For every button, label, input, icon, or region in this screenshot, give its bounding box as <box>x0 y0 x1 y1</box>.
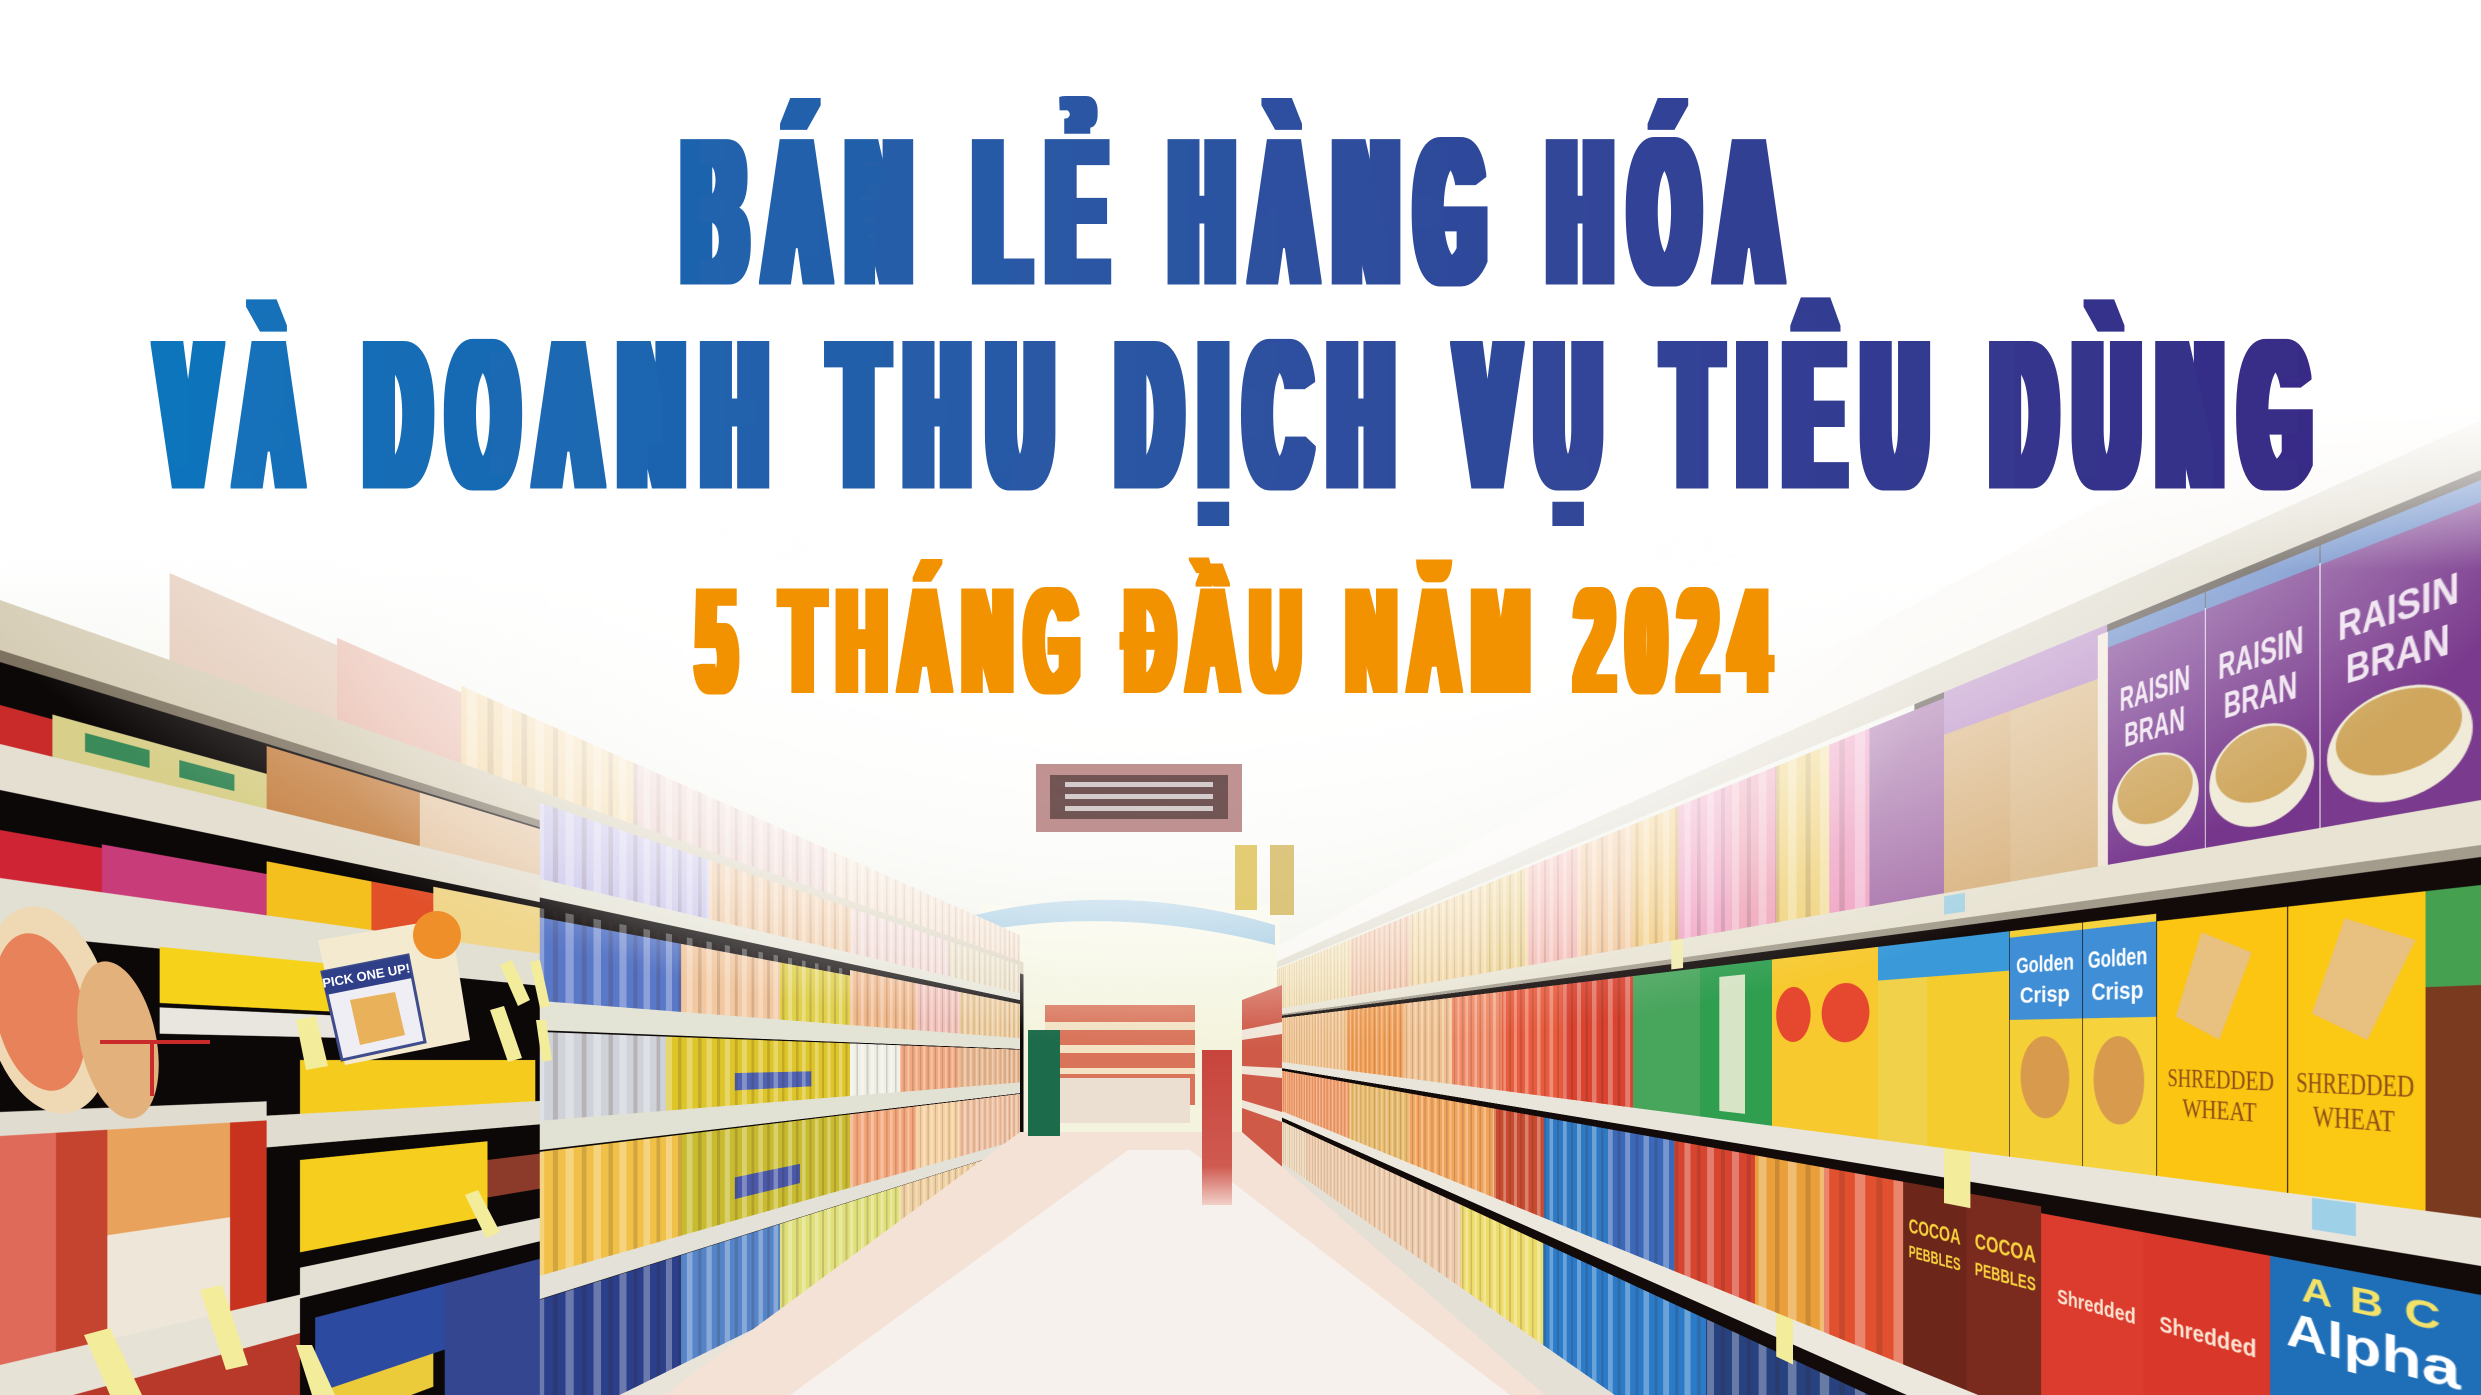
box labels: Golden Crisp, Cocoa Pebbles, Alpha-Bits, Shredded: Golden <box>2088 939 2178 974</box>
box labels: Golden Crisp, Cocoa Pebbles, Alpha-Bits, Shredded <box>1909 912 2462 1395</box>
box labels: Raisin Bran: BRAN <box>2224 646 2353 727</box>
box labels: Raisin Bran: RAISIN <box>2218 594 2371 688</box>
box labels: Golden Crisp, Cocoa Pebbles, Alpha-Bits, Shredded: PEBBLES <box>1975 1259 2060 1303</box>
promo sign: pick one up <box>318 911 470 1065</box>
title line 1: BÁN LẺ HÀNG HÓA <box>685 97 1779 328</box>
shelf 2 <box>0 744 540 902</box>
green end post <box>1028 1030 1060 1136</box>
title line 2: VÀ DOANH THU DỊCH VỤ TIÊU DÙNG <box>160 297 2308 532</box>
shelf 4 <box>0 1101 267 1136</box>
shelf 5 <box>0 1295 300 1395</box>
box labels: Shredded Wheat: WHEAT <box>2313 1101 2454 1144</box>
far stock rows <box>540 803 709 919</box>
promo sign: pick one up: PICK ONE UP! <box>321 960 411 991</box>
row 2 <box>0 830 102 892</box>
box labels: Shredded Wheat <box>2168 911 2415 1141</box>
shelf price tags <box>84 960 552 1395</box>
shelf 3 <box>1277 1109 2481 1395</box>
price tags <box>1944 1148 1970 1208</box>
box labels: Golden Crisp, Cocoa Pebbles, Alpha-Bits, Shredded: Crisp <box>2091 975 2157 1006</box>
row 5 <box>0 1333 300 1395</box>
row A <box>2321 480 2481 828</box>
far end of right shelves <box>1242 985 1282 1180</box>
row D <box>1706 1319 2088 1395</box>
aisle floor <box>664 1132 1545 1395</box>
right shelves with cereal boxes <box>1277 430 2481 1395</box>
shelf 1 <box>1277 800 2481 1016</box>
shelf 4 <box>1277 1159 2481 1395</box>
stacked platters <box>0 894 210 1126</box>
box labels: Shredded Wheat: WHEAT <box>2183 1094 2293 1132</box>
row B <box>2426 885 2481 1218</box>
floor highlight <box>790 1150 1510 1395</box>
subtitle: 5 THÁNG ĐẦU NĂM 2024 <box>698 558 1769 724</box>
faint upper stock <box>170 573 337 719</box>
left shelves with packaged food <box>0 573 1024 1395</box>
box labels: Raisin Bran: BRAN <box>2124 684 2230 754</box>
row 4 <box>0 1133 56 1365</box>
box labels: Golden Crisp, Cocoa Pebbles, Alpha-Bits, Shredded: Shredded <box>2159 1311 2284 1372</box>
top shelf <box>0 600 1023 974</box>
box labels: Raisin Bran: RAISIN <box>2120 638 2245 719</box>
box labels: Raisin Bran <box>2120 563 2459 756</box>
box labels: Golden Crisp, Cocoa Pebbles, Alpha-Bits, Shredded: COCOA <box>1975 1229 2055 1273</box>
box labels: Shredded Wheat: SHREDDED <box>2168 1064 2340 1101</box>
box labels: Golden Crisp, Cocoa Pebbles, Alpha-Bits, Shredded: Golden <box>2016 947 2093 979</box>
row C <box>2270 1256 2481 1395</box>
red end post <box>1202 1050 1232 1205</box>
box labels: Golden Crisp, Cocoa Pebbles, Alpha-Bits, Shredded: Shredded <box>2057 1285 2158 1336</box>
box labels: Golden Crisp, Cocoa Pebbles, Alpha-Bits, Shredded: A B C <box>2302 1269 2441 1339</box>
box labels: Golden Crisp, Cocoa Pebbles, Alpha-Bits, Shredded: PEBBLES <box>1909 1242 1981 1281</box>
box labels: Golden Crisp, Cocoa Pebbles, Alpha-Bits, Shredded: COCOA <box>1909 1214 1977 1254</box>
box labels: Golden Crisp, Cocoa Pebbles, Alpha-Bits, Shredded: Crisp <box>2020 980 2076 1009</box>
shelf 3 <box>0 878 540 986</box>
row 3 <box>160 947 371 1014</box>
row 1 <box>0 705 52 757</box>
shelf 2 <box>1277 1061 2481 1266</box>
